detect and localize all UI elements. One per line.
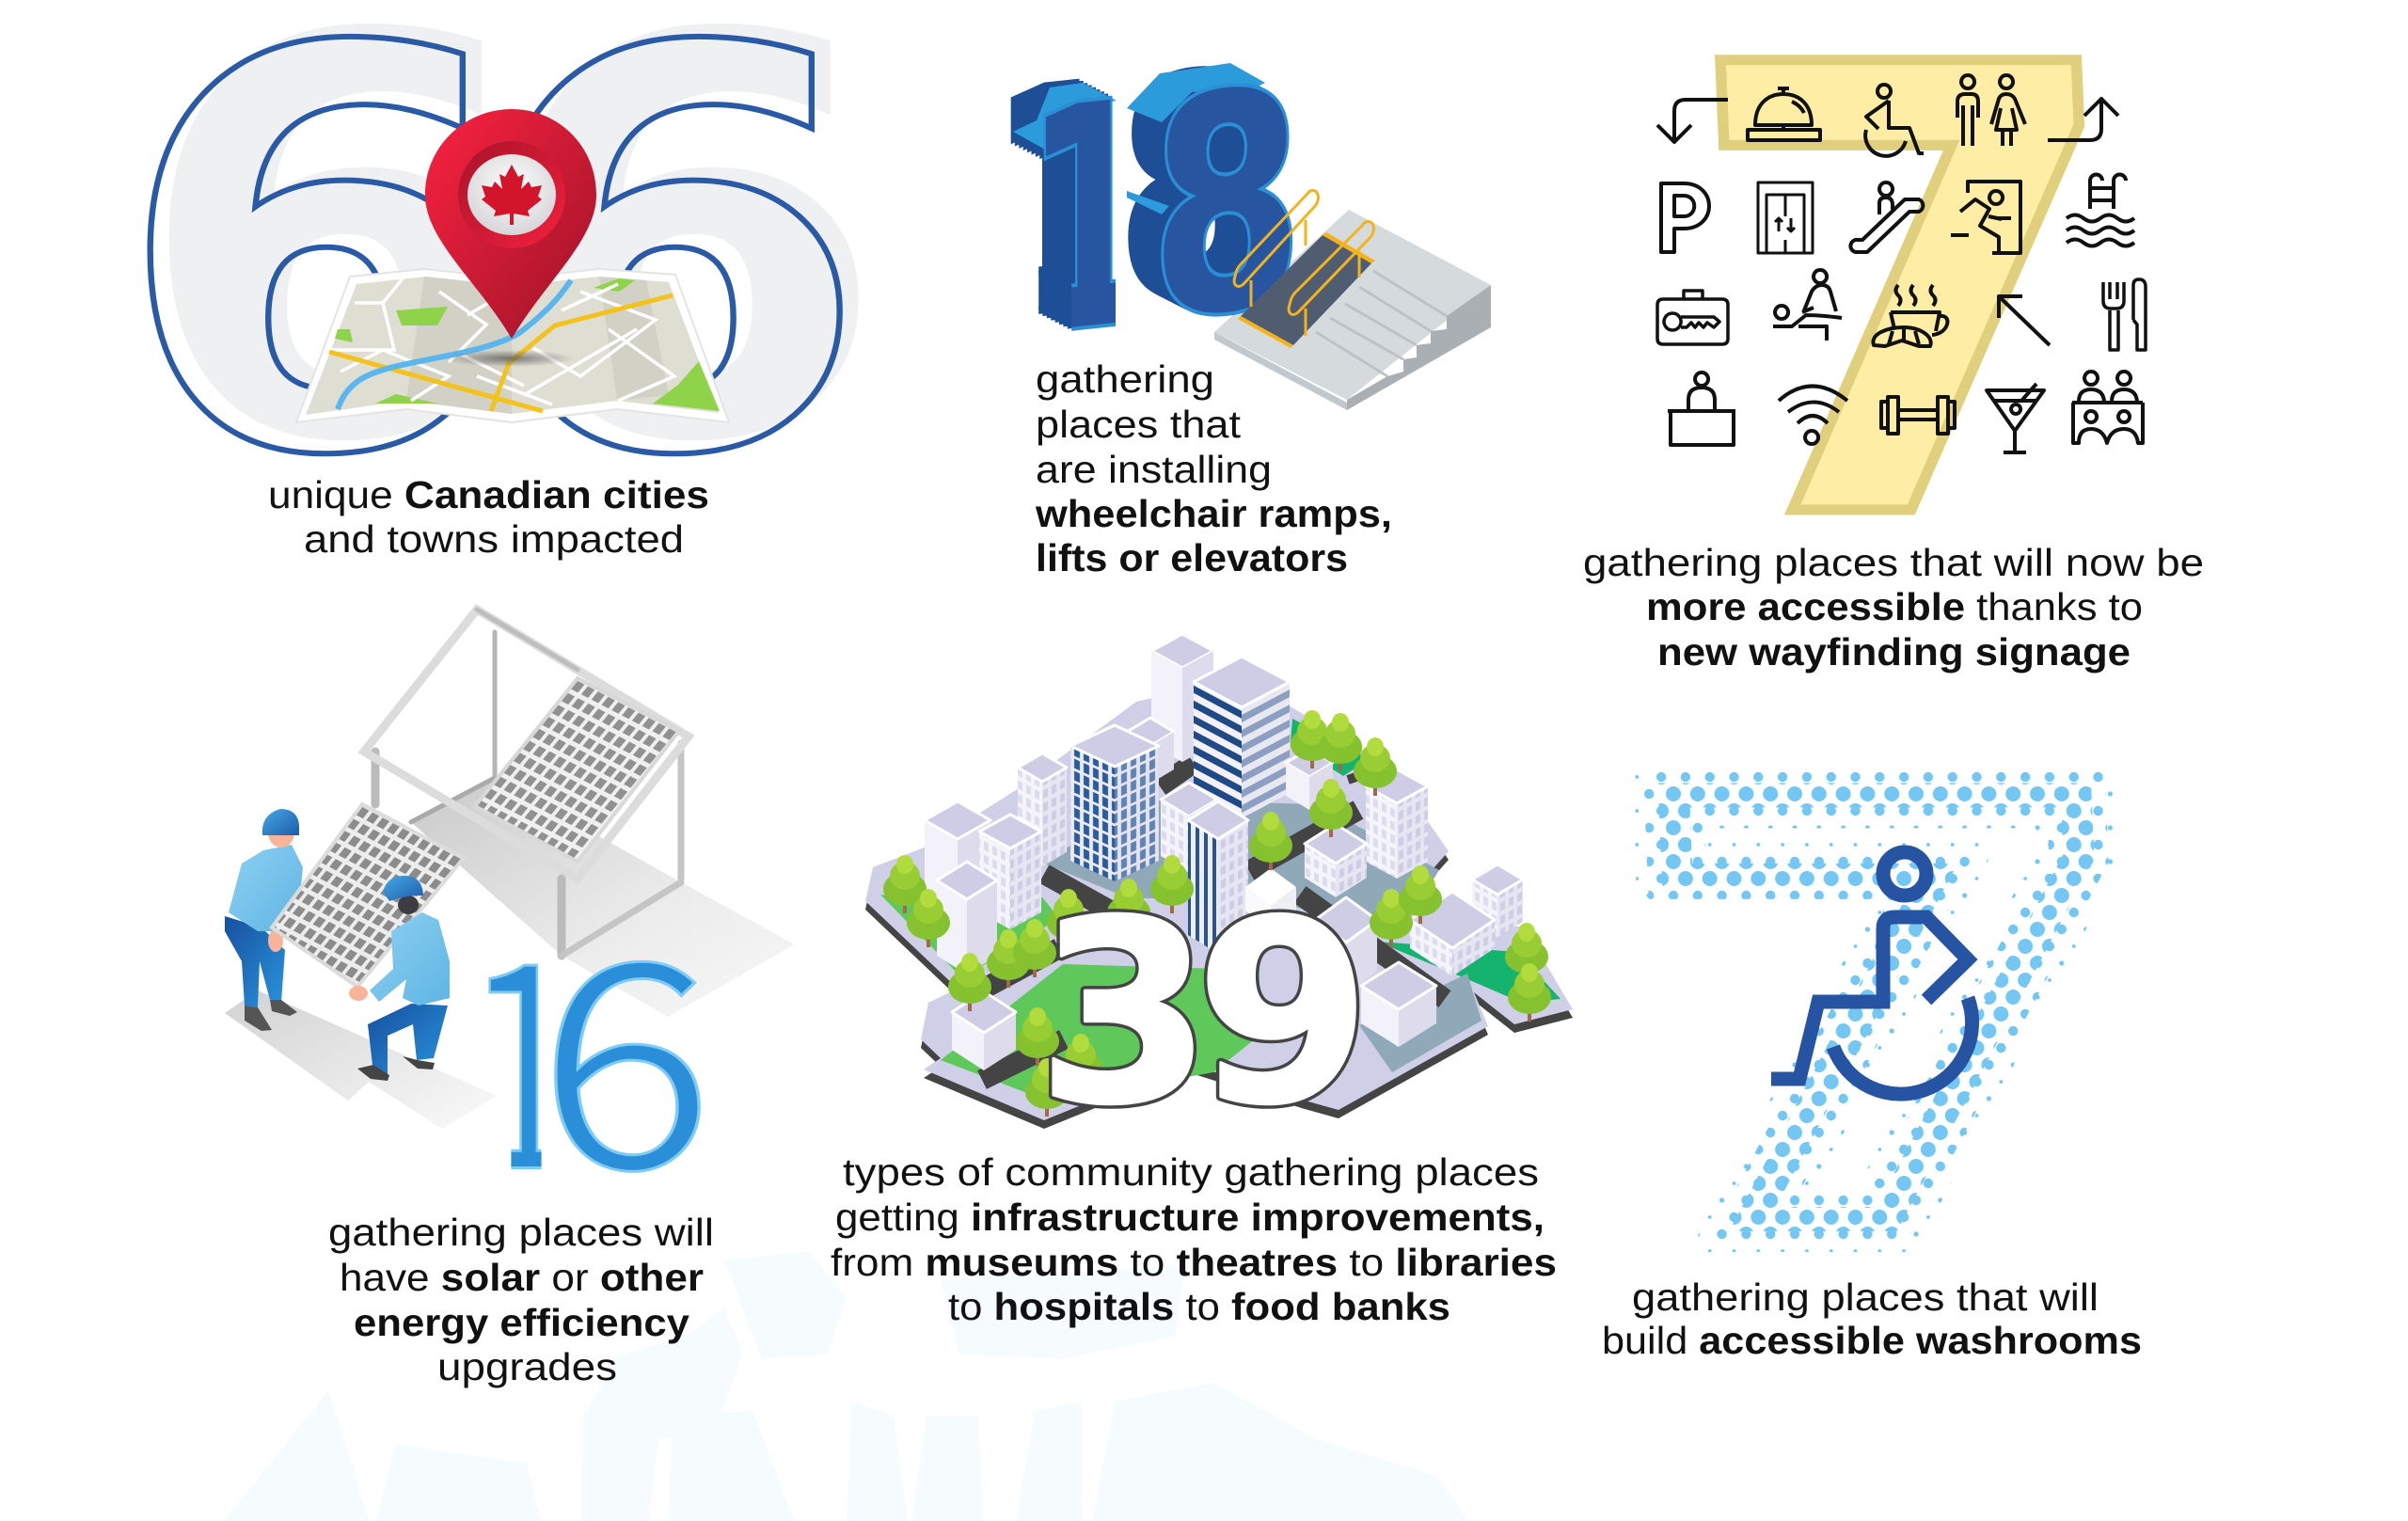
number 18 extrusion: 8 (1126, 11, 1278, 373)
number 7 halftone: 7 (1620, 679, 2159, 1356)
caption: signage: gathering places that will now be (1583, 541, 2204, 584)
caption: signage: more accessible thanks to (1646, 585, 2143, 628)
number 16 (488, 959, 701, 1173)
trees (883, 710, 1551, 1117)
number 16: 1 (460, 840, 588, 1248)
icon: arrow turn up (2048, 99, 2118, 140)
floor shadows (225, 778, 795, 1129)
icon: parking (1661, 183, 1709, 252)
figure: right worker (349, 876, 450, 1081)
caption: types of gathering places: to hospitals to food banks (948, 1285, 1450, 1328)
number 18 extrusion: 8 (1142, 20, 1295, 382)
caption: 18 ramps: wheelchair ramps, (1035, 492, 1392, 535)
icon: wifi (1779, 386, 1847, 444)
caption: 66 cities (268, 473, 709, 561)
caption: types of gathering places: getting infrastructure improvements, (835, 1196, 1545, 1239)
caption: signage: new wayfinding signage (1657, 630, 2131, 673)
caption: washrooms (1602, 1275, 2142, 1362)
number 18 extrusion: 8 (1117, 7, 1271, 370)
roads (972, 763, 1445, 1080)
caption: 18 ramps (1035, 357, 1392, 579)
icon: folded street map (296, 269, 729, 422)
icon: meeting table (2072, 372, 2143, 443)
number 39 (1037, 867, 1370, 1161)
caption: washrooms: gathering places that will (1632, 1275, 2099, 1319)
number 18 extrusion: 1 (992, 18, 1120, 388)
number 18 extrusion: 1 (1017, 31, 1145, 401)
icon: cocktail (1987, 384, 2044, 452)
caption: 18 ramps: places that (1036, 403, 1242, 446)
panel: 18 ramps (1010, 63, 1491, 572)
number 18 extrusion: 8 (1130, 13, 1283, 376)
figure: left worker (225, 809, 303, 1031)
caption: signage (1583, 541, 2204, 673)
icon: arrow up left (1999, 296, 2050, 345)
number 66 blue outline (114, 0, 871, 577)
icon: wheelchair ramp surface and handrails (1234, 191, 1375, 348)
icon: carried solar panel (272, 804, 464, 987)
caption: 66 cities: unique Canadian cities (268, 473, 709, 516)
icon: arrow turn down (1657, 100, 1728, 142)
number 18 extrusion: 1 (1022, 33, 1149, 403)
icon: coffee and croissant (1873, 285, 1947, 346)
caption: washrooms: build accessible washrooms (1602, 1319, 2142, 1362)
icon: massage (1773, 270, 1842, 341)
illustration: isometric city (865, 634, 1573, 1129)
icon: installed solar panel (475, 678, 679, 862)
icon: elevator (1758, 182, 1813, 253)
caption: 18 ramps: gathering (1036, 357, 1214, 401)
ground areas (880, 719, 1560, 1096)
number 18 front face: 8 (1150, 24, 1304, 387)
panel: 16 solar (225, 610, 795, 1388)
number 39: 9 (1196, 867, 1370, 1161)
panel: 7 accessible washrooms (1602, 679, 2159, 1362)
background: faint map of Canada (224, 1251, 1467, 1521)
icon: red location pin with maple leaf (425, 109, 596, 339)
wayfinding icons (1657, 75, 2146, 452)
number 18 extrusion: 8 (1133, 15, 1287, 378)
buildings (925, 634, 1523, 1070)
18 light-blue top faces (1013, 63, 1265, 214)
number 18 front face (1044, 83, 1292, 331)
number 18 extrusion: 1 (1013, 28, 1141, 399)
city base plate (865, 686, 1573, 1129)
number 18 extrusion: 1 (996, 20, 1124, 390)
icon: emergency exit (1951, 182, 2020, 253)
caption: solar: gathering places will (328, 1211, 714, 1254)
caption: types of gathering places: types of community gathering places (843, 1150, 1539, 1194)
panel: 39 community gathering places (831, 634, 1573, 1328)
panel: 7 wayfinding signage (1583, 0, 2204, 673)
number 18 extrusion: 8 (1147, 22, 1299, 385)
caption: 66 cities: and towns impacted (304, 517, 684, 561)
icon: swimming pool (2067, 175, 2134, 246)
number 39: 3 (1037, 867, 1212, 1161)
number 18 front face: 1 (1025, 35, 1153, 404)
number 16: 6 (539, 840, 713, 1248)
icon: escalator (1850, 182, 1923, 252)
icon: wheelchair symbol (1771, 852, 1972, 1094)
caption: 18 ramps: are installing (1036, 448, 1272, 491)
icon: ramp and stairs platform (1214, 210, 1491, 410)
number 39: 3 (1037, 867, 1212, 1161)
number 18 extrusion (1010, 66, 1267, 329)
number 39: 9 (1196, 867, 1370, 1161)
number 18 extrusion: 8 (1121, 8, 1275, 372)
number 18 extrusion: 8 (1138, 17, 1291, 380)
icon: solar roof frame (364, 610, 689, 956)
caption: solar (328, 1211, 714, 1388)
caption: types of gathering places (831, 1150, 1557, 1328)
caption: solar: upgrades (437, 1345, 617, 1388)
caption: types of gathering places: from museums to theatres to libraries (831, 1241, 1557, 1284)
icon: service bell (1748, 88, 1820, 140)
number 18 extrusion: 1 (1008, 26, 1137, 396)
icon: key box (1657, 291, 1728, 344)
icon: fork and knife (2103, 279, 2146, 350)
number 18 extrusion: 1 (1005, 24, 1133, 394)
number 18 extrusion: 1 (1001, 23, 1129, 392)
caption: solar: energy efficiency (354, 1301, 689, 1344)
panel: 66 cities (114, 0, 890, 577)
caption: 18 ramps: lifts or elevators (1036, 536, 1348, 579)
icon: dumbbell (1881, 397, 1955, 434)
caption: solar: have solar or other (340, 1256, 704, 1299)
number 7 halftone: 7 (1620, 679, 2159, 1356)
number 66 grey backing (133, 0, 890, 563)
icon: reception desk (1668, 372, 1735, 445)
icon: restroom figures (1957, 75, 2025, 146)
number 7 halftone: 7 (1620, 679, 2159, 1356)
icon: wheelchair user (1865, 85, 1924, 156)
